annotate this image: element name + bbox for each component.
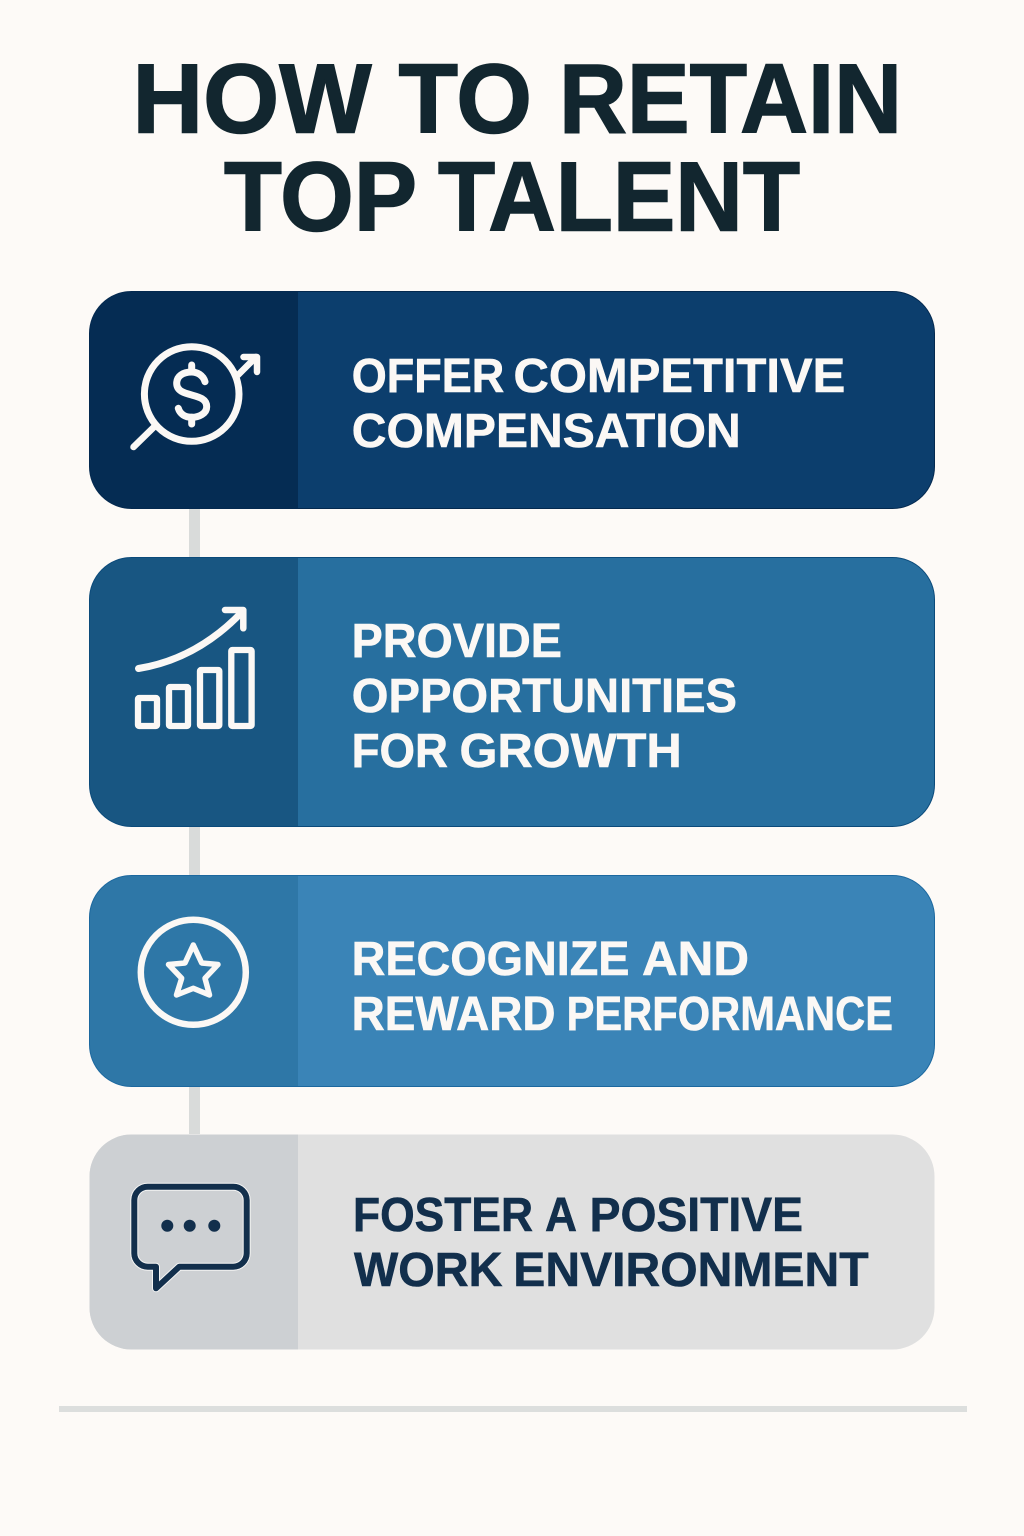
text: offer competitive compensation: COMPENSATION — [352, 404, 741, 458]
text: provide opportunities for growth: GROWTH — [460, 724, 682, 778]
text: foster a positive work environment: A — [545, 1188, 577, 1242]
title: HOW — [132, 44, 372, 154]
text: offer competitive compensation — [352, 349, 845, 458]
text: foster a positive work environment — [353, 1188, 869, 1297]
text: provide opportunities for growth: PROVIDE — [352, 614, 562, 668]
title: TALENT — [438, 142, 800, 252]
title: TO — [398, 44, 532, 154]
icon: speech bubble — [134, 1187, 247, 1288]
title — [132, 44, 902, 252]
text: recognize and reward performance — [352, 932, 893, 1041]
panel: foster a positive work environment — [89, 1134, 934, 1350]
icon: star in circle — [141, 920, 246, 1025]
connector: step 1 to 2 — [189, 508, 200, 557]
text: provide opportunities for growth: OPPORTUNITIES — [352, 669, 737, 723]
panel: provide opportunities for growth — [89, 557, 934, 827]
panel: offer competitive compensation — [89, 291, 934, 509]
text: recognize and reward performance: AND — [642, 932, 749, 986]
text: offer competitive compensation: OFFER — [352, 349, 504, 403]
text: foster a positive work environment: POSITIVE — [590, 1188, 803, 1242]
icon: rising bar chart — [138, 610, 252, 726]
text: provide opportunities for growth: FOR — [352, 724, 448, 778]
title: RETAIN — [559, 44, 902, 154]
connector: step 3 to 4 — [189, 1086, 200, 1134]
icon: dollar coin with arrow — [134, 347, 257, 447]
text: foster a positive work environment: ENVIRONMENT — [513, 1243, 869, 1297]
text: recognize and reward performance: REWARD — [352, 987, 556, 1041]
text: recognize and reward performance: PERFORMANCE — [567, 987, 893, 1041]
panel: recognize and reward performance — [89, 875, 934, 1087]
text: provide opportunities for growth — [352, 614, 737, 778]
text: offer competitive compensation: COMPETITIVE — [514, 349, 845, 403]
text: foster a positive work environment: WORK — [354, 1243, 502, 1297]
text: recognize and reward performance: RECOGNIZE — [352, 932, 630, 986]
title: TOP — [224, 142, 417, 252]
text: foster a positive work environment: FOSTER — [353, 1188, 533, 1242]
connector: step 2 to 3 — [189, 826, 200, 875]
